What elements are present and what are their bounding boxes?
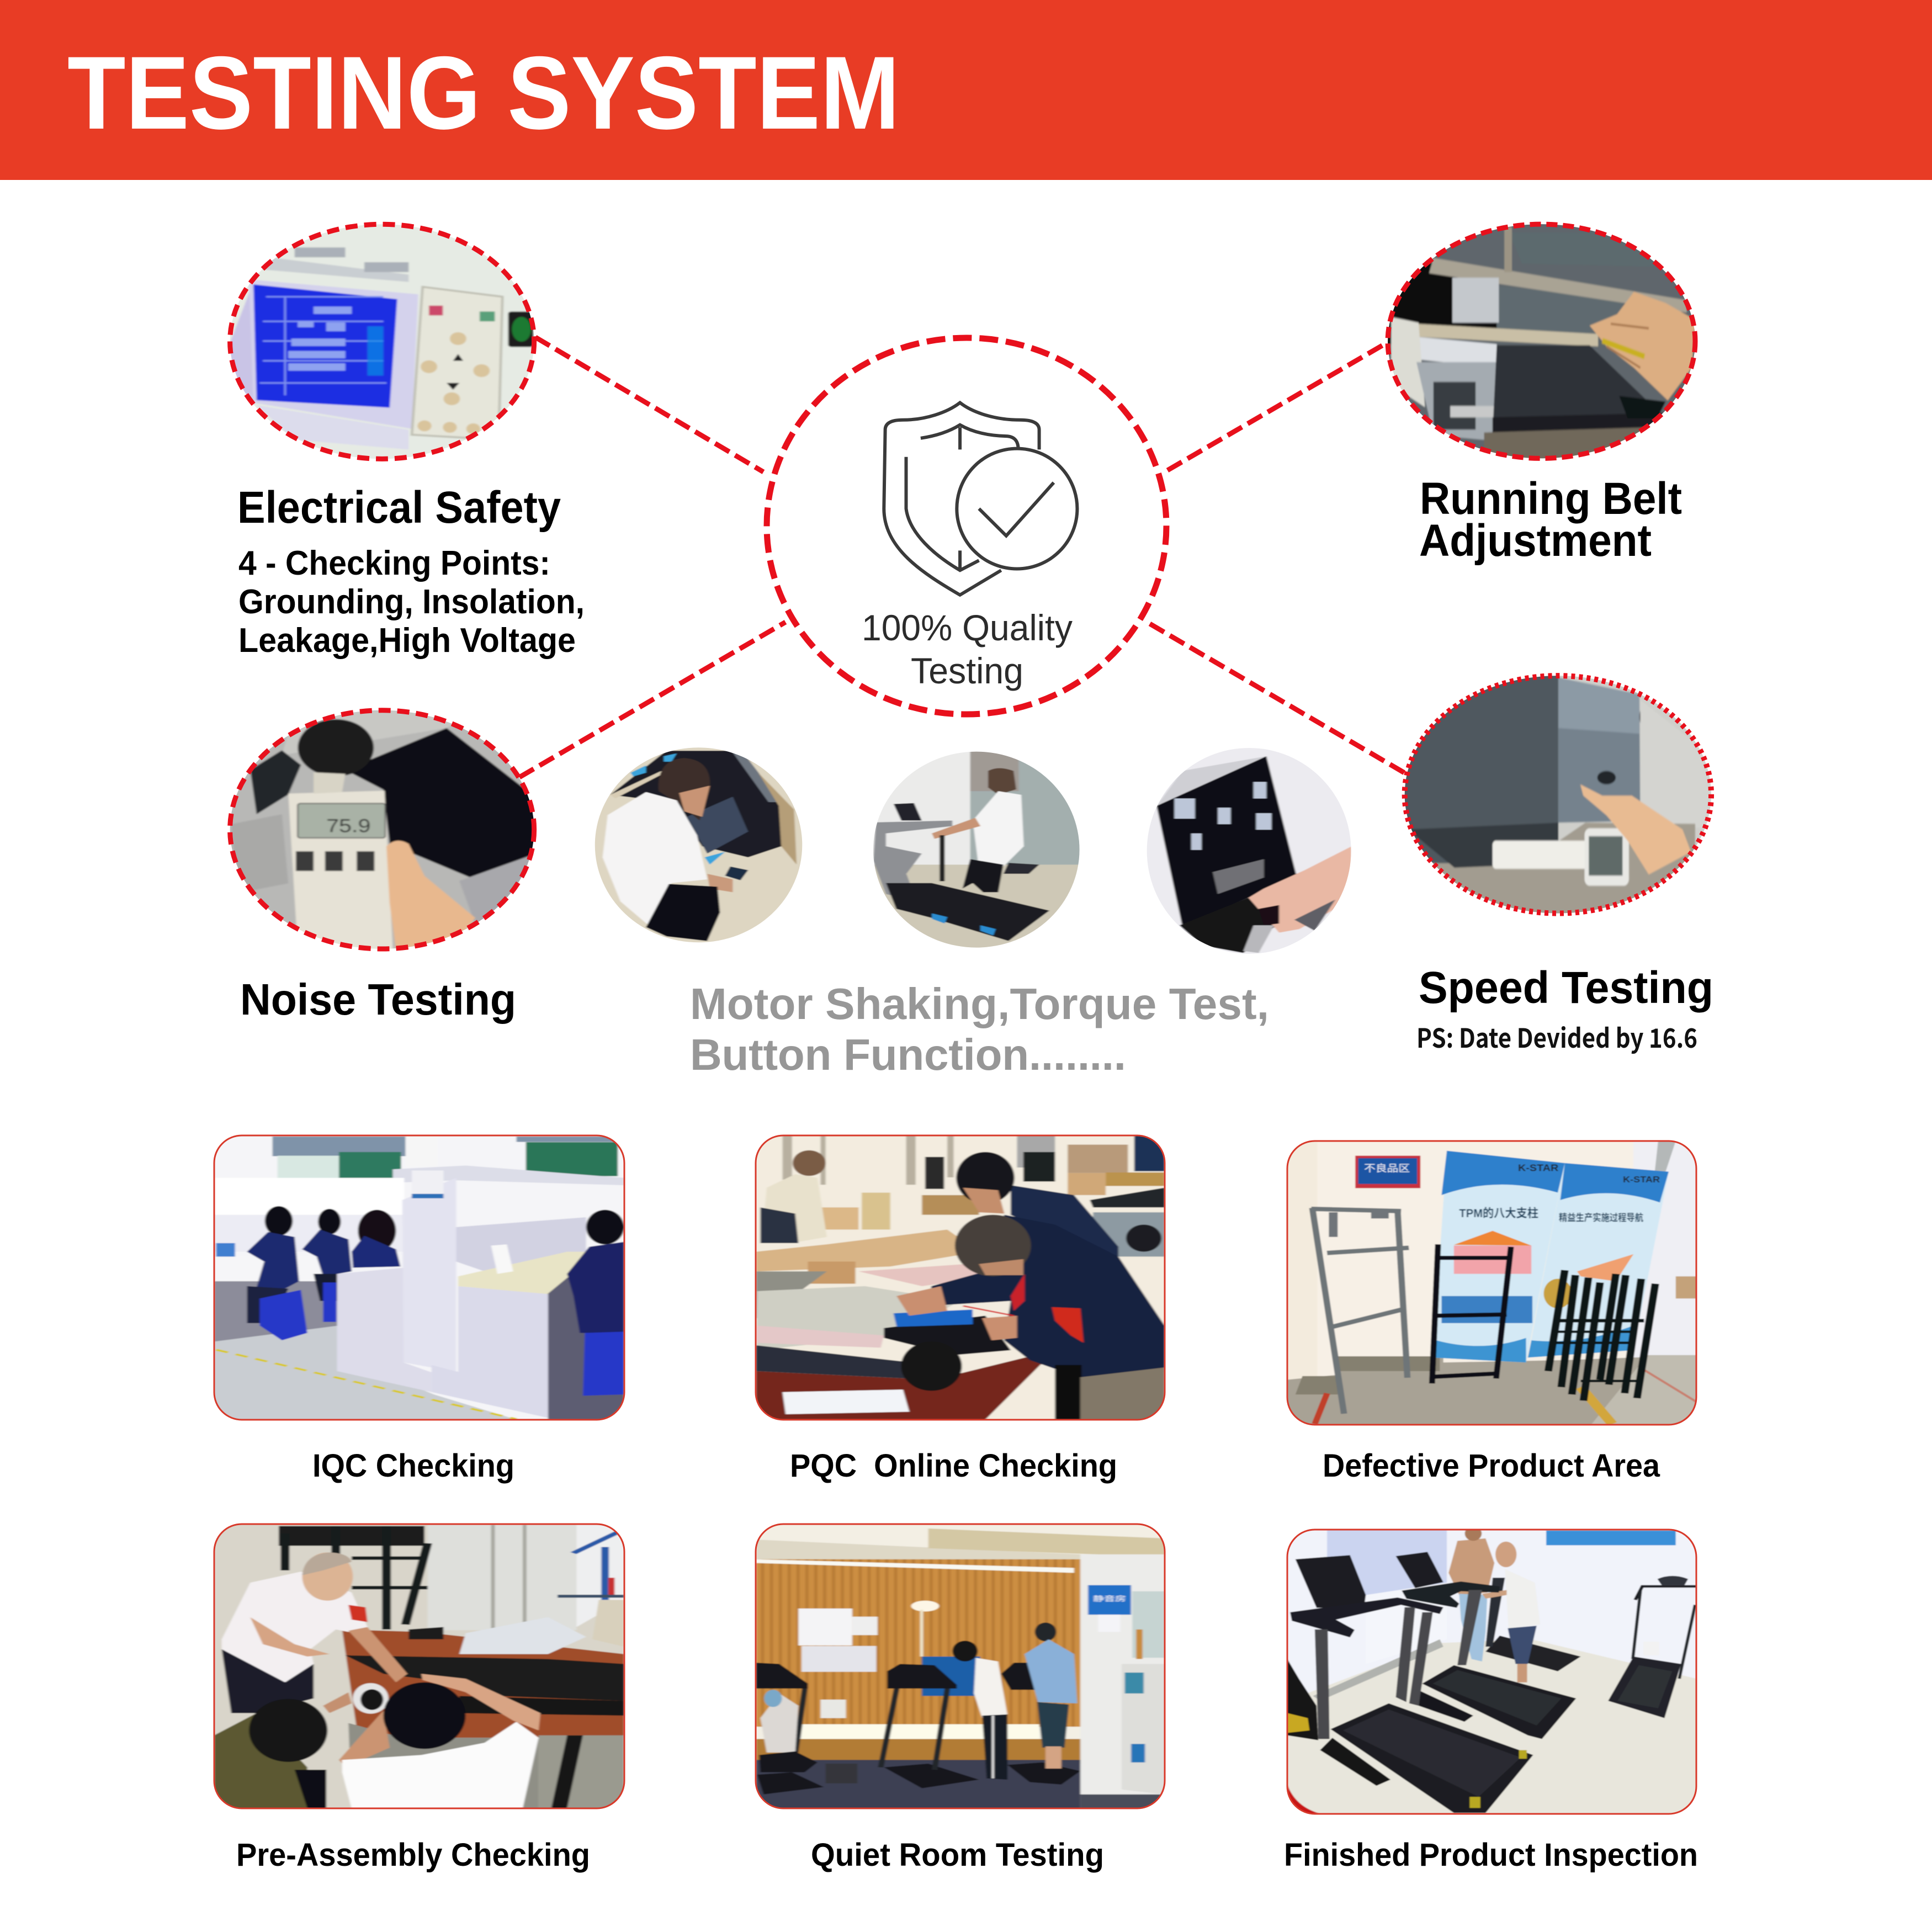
text block: checking points: Leakage,High Voltage	[238, 622, 576, 660]
badge text: 100% Quality	[862, 607, 1073, 648]
caption: PQC online checking: PQC Online Checking	[790, 1448, 1117, 1484]
photo: defective product area: 不良品区	[1364, 1163, 1410, 1174]
connector: speed testing to centre	[1150, 624, 1408, 775]
photo: defective product area: K-STAR	[1518, 1162, 1558, 1173]
photo circle: button function	[1142, 747, 1356, 957]
heading: electrical safety: Electrical Safety	[237, 482, 561, 533]
photo circle: electrical safety tester	[225, 218, 542, 464]
caption: quiet room testing: Quiet Room Testing	[811, 1837, 1104, 1873]
caption: IQC checking: IQC Checking	[312, 1448, 514, 1484]
heading: speed testing: Speed Testing	[1419, 963, 1713, 1013]
connector: running belt to centre	[1167, 344, 1385, 470]
photo circle: running belt adjustment	[1383, 221, 1703, 464]
note: date divided: PS: Date Devided by 16.6	[1416, 1017, 1697, 1055]
text: motor shaking, torque test, button function: Motor Shaking,Torque Test,	[690, 979, 1269, 1028]
text: motor shaking, torque test, button function	[690, 979, 1269, 1079]
text block: checking points	[238, 544, 585, 660]
caption: finished product inspection: Finished Product Inspection	[1284, 1837, 1698, 1873]
badge text	[862, 607, 1073, 691]
photo: PQC online checking	[756, 1135, 1165, 1420]
photo circle: noise testing meter	[225, 706, 542, 952]
photo: pre-assembly checking	[214, 1524, 624, 1808]
photo: quiet room testing: 静音房	[1093, 1595, 1126, 1603]
photo circle: noise testing meter: 75.9	[326, 816, 370, 836]
photo: defective product area	[1287, 1141, 1696, 1425]
caption: pre-assembly checking: Pre-Assembly Checking	[236, 1837, 590, 1873]
heading: noise testing: Noise Testing	[240, 975, 516, 1024]
photo: quiet room testing	[756, 1524, 1165, 1808]
photo circle: torque test	[871, 751, 1085, 949]
text: motor shaking, torque test, button function: Button Function........	[690, 1030, 1126, 1079]
heading: running belt adjustment: Adjustment	[1419, 516, 1652, 566]
heading: running belt adjustment: Running Belt	[1420, 474, 1682, 524]
photo: defective product area: K-STAR	[1623, 1175, 1660, 1185]
badge text: Testing	[911, 650, 1023, 691]
photo circle: speed testing	[1400, 672, 1721, 920]
text block: checking points: Grounding, Insolation,	[238, 583, 585, 621]
connector: noise testing to centre	[519, 622, 785, 777]
heading: running belt adjustment	[1419, 474, 1682, 566]
text block: checking points: 4 - Checking Points:	[238, 544, 550, 582]
photo: IQC checking	[214, 1135, 624, 1420]
centre badge: 100% quality testing	[767, 338, 1166, 714]
connector: electrical safety to centre	[535, 337, 763, 472]
icon: shield with check mark	[884, 403, 1077, 595]
caption: defective product area: Defective Product Area	[1323, 1448, 1660, 1484]
header band	[0, 0, 1932, 180]
photo: finished product inspection	[1287, 1526, 1696, 1814]
title: TESTING SYSTEM	[67, 35, 900, 151]
photo: defective product area: TPM的八大支柱	[1459, 1207, 1538, 1220]
photo: defective product area: 精益生产实施过程导航	[1559, 1212, 1643, 1223]
photo circle: motor shaking test	[590, 745, 809, 946]
